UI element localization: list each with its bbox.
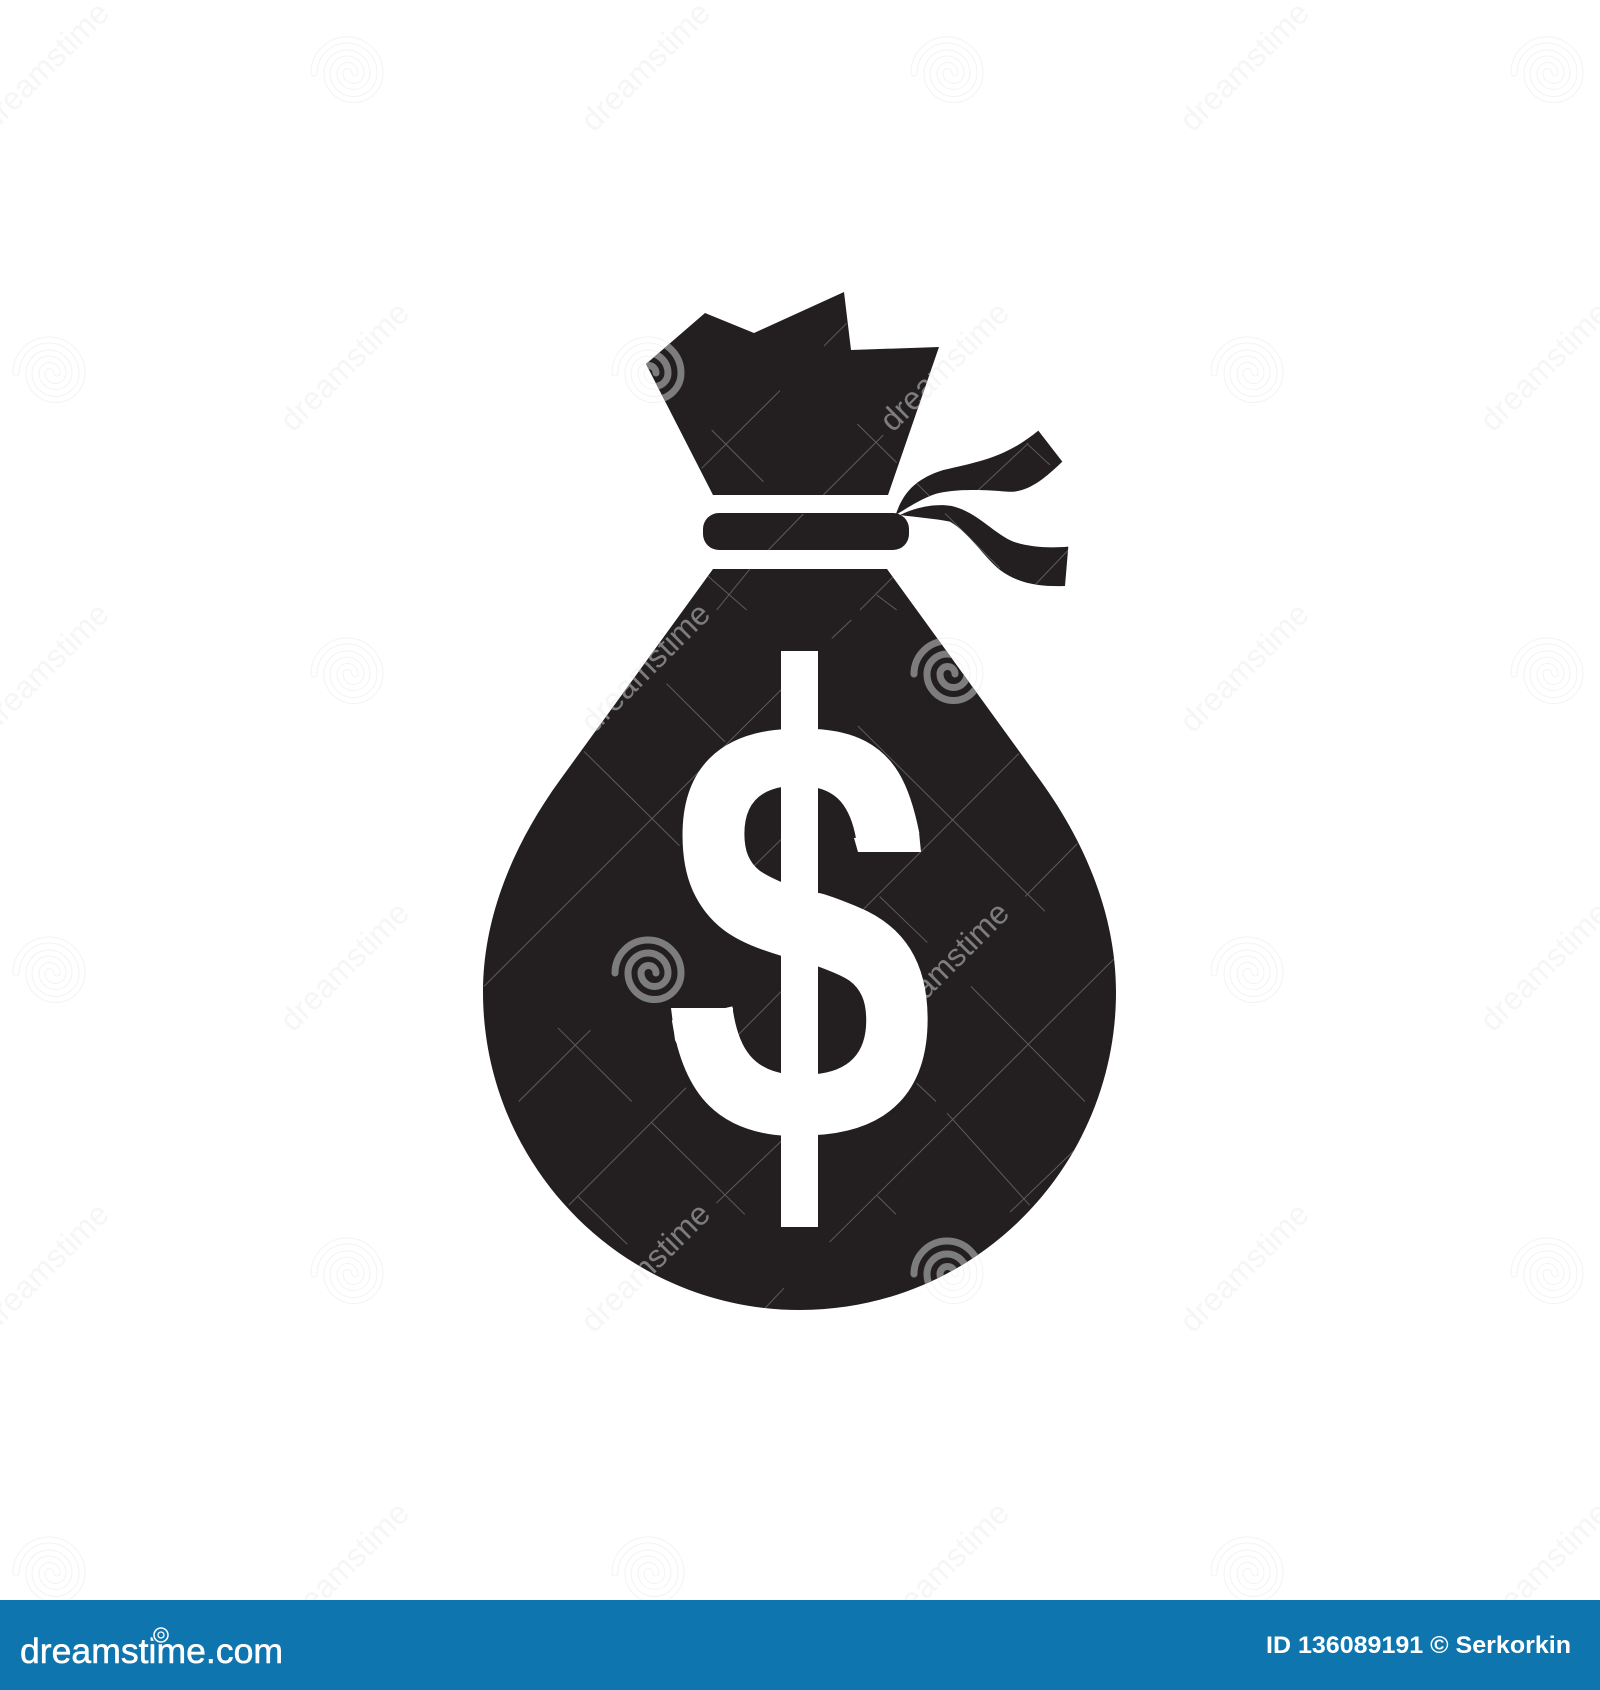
faint watermark text: dreamstime xyxy=(272,294,416,438)
icon: money bag xyxy=(483,292,1117,1339)
faint watermark text: dreamstime xyxy=(1172,595,1316,739)
watermark overlay on bag xyxy=(484,294,1117,1339)
watermark overlay on bag: dreamstime xyxy=(573,1195,717,1339)
faint watermark text: dreamstime xyxy=(872,294,1016,438)
icon: dollar sign: $ xyxy=(666,589,934,1272)
bag body xyxy=(483,569,1116,1310)
faint watermark text: dreamstime xyxy=(1172,1195,1316,1339)
faint watermark text: dreamstime xyxy=(872,1494,1016,1638)
footer bar xyxy=(0,1600,1600,1690)
watermark overlay on bag: dreamstime xyxy=(872,294,1016,438)
faint watermark text: dreamstime xyxy=(573,1195,717,1339)
faint watermark text: dreamstime xyxy=(573,595,717,739)
faint watermark text: dreamstime xyxy=(272,1494,416,1638)
footer logo text: dreamstime.com xyxy=(20,1632,283,1671)
faint watermark text: dreamstime xyxy=(872,894,1016,1038)
bag tie band xyxy=(703,513,909,550)
watermark overlay on bag: dreamstime xyxy=(573,595,717,739)
ribbon ends xyxy=(896,431,1068,586)
footer image id and credit: ID 136089191 © Serkorkin xyxy=(1266,1632,1571,1659)
bag top ruffle xyxy=(646,292,939,495)
faint watermark text: dreamstime xyxy=(272,894,416,1038)
watermark overlay on bag: dreamstime xyxy=(872,894,1016,1038)
